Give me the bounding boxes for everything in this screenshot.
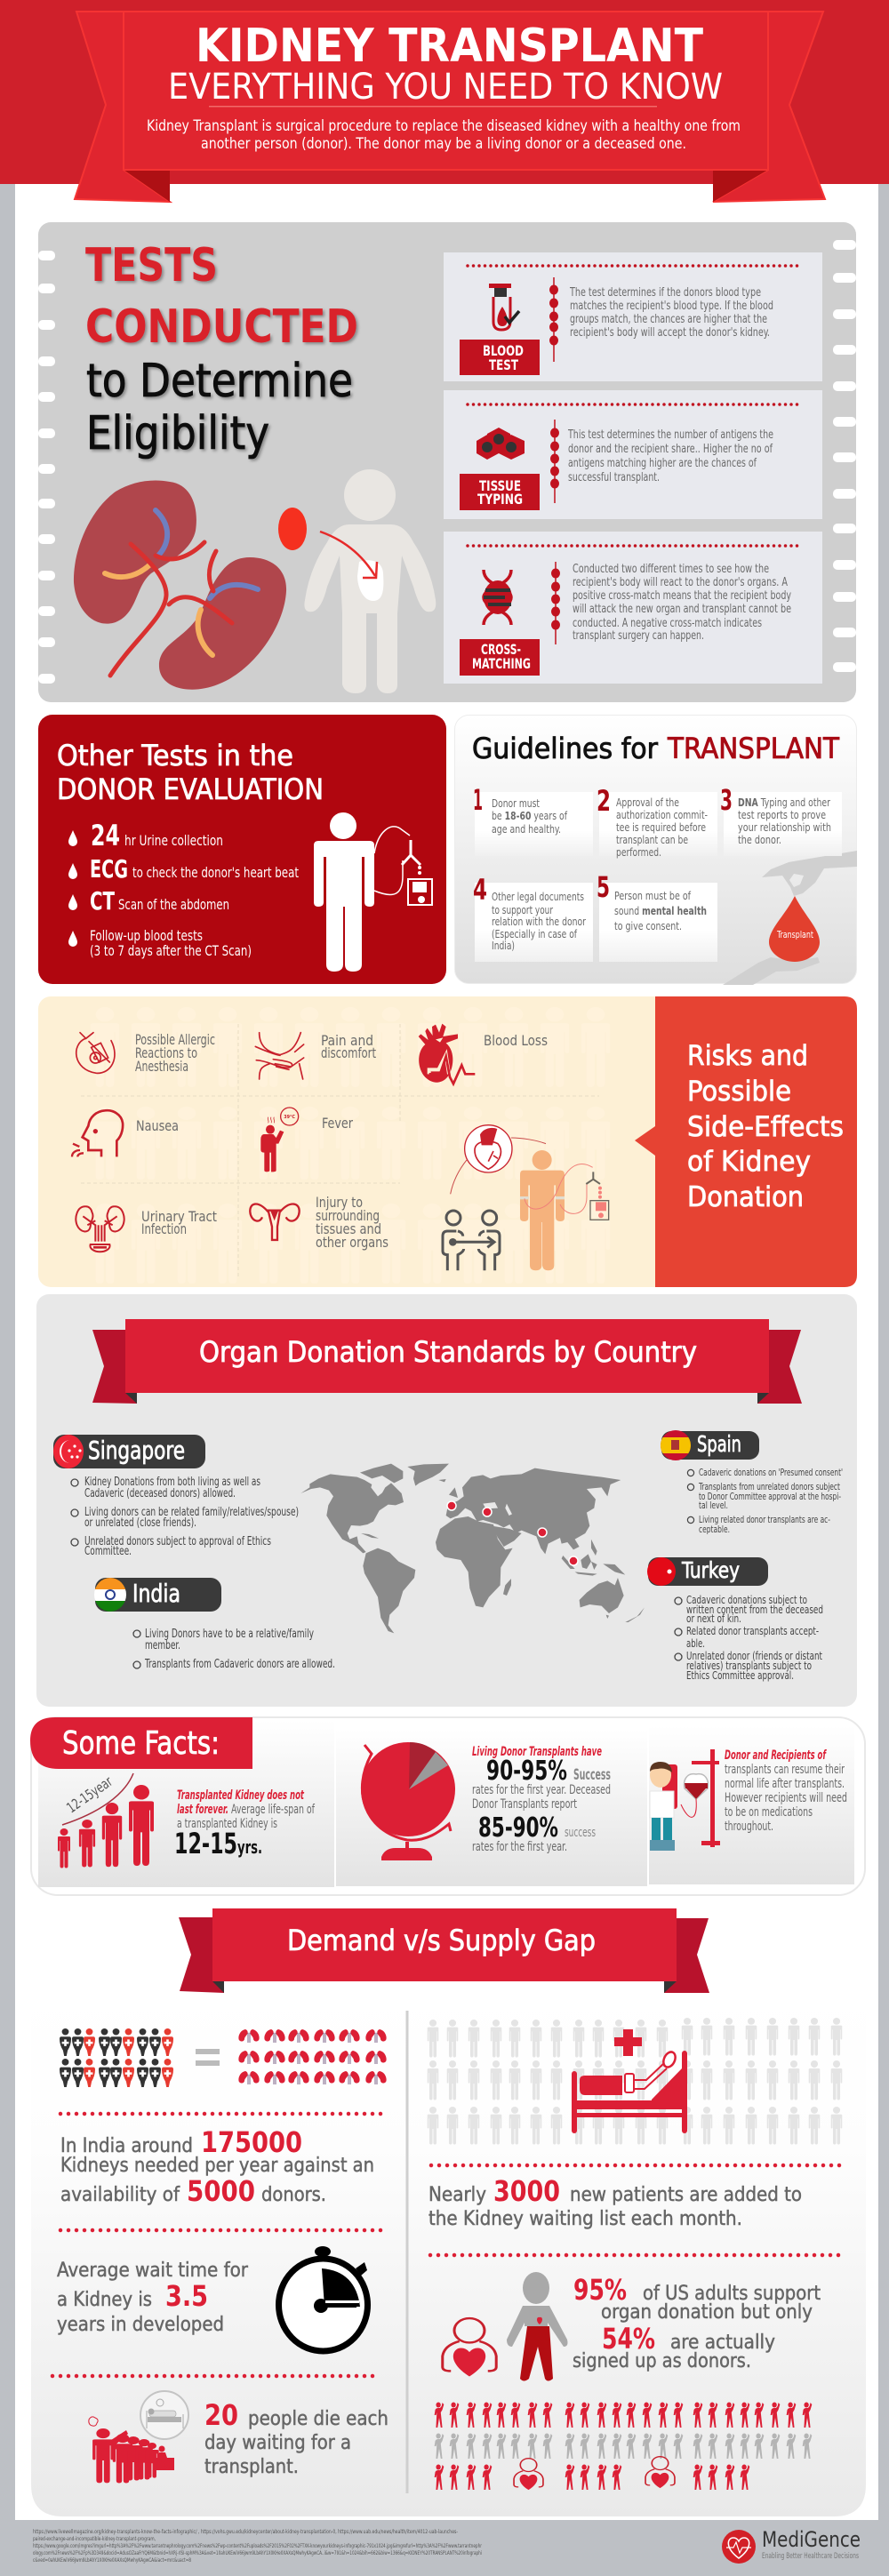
guideline 4: Other legal documents [492,890,584,903]
list: spain: tal level. [699,1500,728,1511]
footer: references: ology.com%2Fnews%2F%2Fp%3D349&docid=AdusOZaaFrYQ6M&tbnid=hXRj-rlSI-sphM%3A&vet=10ahUKEwiV66Jwm9LbAhY1X0KHe0XAXsQMwhyKAgwCA..i&w=791&h=1024&bih=662&biw=1366&q=KIDNEY%20TRANSPLANT%20infographi [33,2550,482,2556]
heading: guidelines: Guidelines for [472,732,658,765]
stat: wait time: years in developed [57,2314,224,2336]
guideline 4 [473,873,593,962]
text: cross-matching description: will attack the new organ and transplant cannot be [573,603,791,616]
list: singapore: Living donors can be related family/relatives/spouse) [84,1506,299,1519]
panel: tests conducted [38,222,856,702]
card: tissue typing [444,390,822,519]
banner: organ donation standards [92,1319,802,1404]
risk labels: Possible Allergic [135,1031,215,1048]
icon: uterus [250,1204,300,1240]
list: turkey: Ethics Committee approval. [686,1669,794,1682]
fact: kidney lifespan: 12-15 [174,1827,237,1860]
fact: life after transplant: However recipients will need [725,1791,847,1805]
fact: success rates: Donor Transplants report [472,1797,577,1812]
text: cross-matching description: recipient's body will react to the donor's organs. A [573,576,788,589]
banner: organ donation standards: Organ Donation Standards by Country [199,1335,697,1369]
guideline 3: the donor. [738,833,781,846]
icon: donor support figure [443,2272,567,2380]
heading: tests conducted to determine eligibility: to Determine [86,355,353,408]
risk labels: Blood Loss [484,1032,548,1049]
guideline 5: Person must be of [614,889,692,902]
label: cross-matching: CROSS- [481,641,521,658]
icon: allergic reaction [76,1033,115,1073]
stat: 175000 kidneys [60,2125,374,2208]
panel: other tests in the donor evaluation [38,715,446,984]
heading: guidelines [472,732,839,765]
label: tissue typing: TISSUE [479,477,521,494]
stat: 175000 kidneys: 175000 [201,2125,302,2159]
fact: kidney lifespan: Transplanted Kidney does not [177,1788,305,1803]
stat: 20 people die: people die each [248,2408,388,2430]
stat: 3000 new patients: the Kidney waiting list each month. [428,2208,742,2230]
list: singapore: Committee. [84,1545,132,1558]
list: spain: Transplants from unrelated donors subject [698,1482,840,1492]
stat: 175000 kidneys: donors. [261,2184,326,2206]
icon: kidneys [74,480,286,690]
stat: 20 people die: 20 [204,2398,238,2432]
stat: wait time [57,2260,249,2336]
list: singapore: Kidney Donations from both living as well as [84,1476,260,1489]
guideline 4: relation with the donor [492,915,586,928]
guideline 2: tee is required before [616,820,706,834]
list: turkey: Cadaveric donations subject to [686,1594,807,1606]
logo: medigence [722,2527,861,2564]
list: turkey: or next of kin. [686,1612,741,1625]
icon: waiting-list crowd and hospital bed [428,2018,842,2145]
text: cross-matching description: conducted. A negative cross-match indicates [573,617,762,630]
text: tissue typing description: This test determines the number of antigens the [567,428,773,442]
label: cross-matching: MATCHING [472,655,531,672]
guideline 3: test reports to prove [738,808,826,821]
stat: 3000 new patients: new patients are added to [570,2184,802,2206]
guideline 5 [597,870,717,962]
text: cross-matching description: transplant surgery can happen. [573,629,704,643]
fact: success rates: 85-90% [478,1812,558,1844]
guideline 2: performed. [616,845,661,859]
stat: 20 people die: day waiting for a [204,2432,351,2454]
fact: success rates: Success [573,1766,611,1784]
label: tissue typing [460,474,540,510]
icon: donor figure with blood bag [314,812,432,972]
text: cross-matching description: positive cross-match means that the recipient body [573,589,791,603]
red heading panel: Donation [687,1181,804,1213]
icon: molecule [477,428,525,460]
icon: rows of people [435,2402,812,2490]
intro paragraph: Kidney Transplant is surgical procedure to replace the diseased kidney with a healthy one from [147,117,741,135]
red heading panel: of Kidney [687,1146,811,1178]
panel: some facts [30,1717,865,1895]
fact: life after transplant: to be on medications [725,1805,813,1820]
fact: kidney lifespan: last forever. [177,1803,228,1817]
list: spain [687,1468,843,1535]
fact: success rates: rates for the first year. Deceased [472,1783,611,1797]
heading: tests conducted to determine eligibility [85,239,358,460]
list: turkey: Related donor transplants accept- [686,1625,819,1637]
stat: 3000 new patients: 3000 [493,2174,560,2208]
text: blood test description: groups match, the chances are higher that the [570,313,767,326]
logo: medigence: MediGence [762,2527,861,2552]
risk labels: tissues and [316,1220,381,1237]
risk labels: Injury to [316,1194,363,1211]
list: tests: 24 [91,819,120,852]
icon: stopwatch [279,2246,368,2351]
guideline 1: be 18-60 years of [492,809,568,822]
guideline 5: 5 [597,870,610,904]
heading: tests conducted to determine eligibility: Eligibility [86,407,269,460]
icon: dna [484,570,512,625]
icon: transplant drop [769,896,820,962]
stat: 175000 kidneys: In India around [60,2135,193,2157]
risk labels: surrounding [316,1207,380,1224]
fact: success rates [472,1745,611,1854]
list: tests: to check the donor's heart beat [132,864,299,881]
intro paragraph [147,117,741,153]
guideline 5: to give consent. [614,919,682,932]
badge: india: India [132,1579,180,1608]
header ribbon [75,12,825,202]
stat: 20 people die: transplant. [204,2456,299,2478]
footer: references: c&ved=0ahUKEwiV66Jwm9LbAhY1X0KHe0XAXsQMwhyKAgwCA&iact=mrc&uact=8 [33,2557,191,2564]
badge: india [92,1577,221,1613]
heading: other tests [57,739,324,806]
list: spain: ceptable. [699,1524,730,1535]
badge: turkey [647,1557,768,1586]
panel: risks and side-effects [38,996,857,1287]
guideline 5: sound mental health [614,904,707,917]
risk labels: Fever [322,1115,353,1132]
list: tests: Scan of the abdomen [118,896,229,913]
guideline 3: DNA Typing and other [738,796,830,809]
card: blood test [444,252,822,381]
risk labels: Reactions to [135,1044,197,1061]
icon: test tube [489,284,519,330]
stat: 95% support: 95% [573,2273,627,2307]
map markers [447,1501,578,1565]
text: tissue typing description: antigens matching higher are the chances of [568,457,757,470]
list: tests: hr Urine collection [124,832,223,849]
label: cross-matching [460,639,540,676]
guideline 4: to support your [492,903,553,916]
list: turkey: relatives) transplants subject to [686,1660,812,1672]
red heading panel: Risks and [687,1040,808,1072]
icon: urinary tract [76,1206,124,1252]
header band [0,0,889,202]
fact: life after transplant: throughout. [725,1820,773,1834]
stat: 175000 kidneys: 5000 [187,2174,255,2208]
stat: 95% support: organ donation but only [601,2301,813,2324]
heading: other tests: Other Tests in the [57,739,293,772]
risk labels: Pain and [321,1032,373,1049]
icon: heart with pulse [419,1024,475,1084]
fact: kidney lifespan [58,1772,315,1868]
guideline 2: transplant can be [616,833,688,846]
list: spain: to Donor Committee approval at the hospi- [699,1492,841,1502]
hands holding a drop [723,851,857,985]
list: tests: Follow-up blood tests [90,927,203,944]
label: tissue typing: TYPING [477,491,523,508]
guideline 2: authorization commit- [616,808,708,821]
panel: guidelines for transplant [455,715,857,985]
icon: fever: 39°C [284,1115,295,1120]
banner: demand vs supply gap: Demand v/s Supply Gap [287,1924,596,1957]
guideline 4: (Especially in case of [492,927,578,940]
guideline 1: Donor must [492,796,540,810]
list: india [133,1628,335,1671]
guideline 3: your relationship with [738,820,831,834]
text: blood test description: recipient's body will accept the donor's kidney. [570,326,770,340]
list: singapore: Cadaveric (deceased donors) allowed. [84,1487,236,1500]
text: tissue typing description: successful transplant. [568,471,660,484]
badge: spain [658,1429,759,1461]
list: tests: CT [90,886,116,916]
stat: 95% support: of US adults support [643,2283,821,2305]
fact: kidney lifespan: Average life-span of [231,1803,315,1817]
text: blood test description: matches the recipient's blood type. If the blood [570,300,773,313]
icon: fever [260,1108,299,1172]
risk labels [135,1031,548,1251]
icon: nausea [72,1110,123,1156]
list: tests: ECG [90,854,128,884]
icon: patient with drip stand [650,1749,720,1851]
tab: some facts [30,1717,252,1769]
fact: life after transplant: transplants can resume their [725,1763,845,1777]
fact: kidney lifespan: 12-15year [63,1772,116,1816]
list: turkey: written content from the deceased [686,1604,823,1616]
panel: demand vs supply [31,1908,866,2516]
icon: globe pie chart [361,1742,455,1860]
red heading panel: Side-Effects [687,1111,844,1143]
subtitle: EVERYTHING YOU NEED TO KNOW [168,67,723,108]
text: cross-matching description: Conducted two different times to see how the [573,563,769,576]
fact: success rates: 90-95% [486,1756,567,1787]
text: blood test description [569,286,773,340]
title: KIDNEY TRANSPLANT [196,20,703,73]
list: india: member. [145,1639,180,1652]
list: turkey [675,1594,823,1682]
stat: 95% support: signed up as donors. [573,2350,751,2372]
guideline 1: 1 [473,783,483,817]
stat: wait time: a Kidney is [57,2289,152,2311]
stat: 95% support: are actually [670,2332,775,2354]
stat: wait time: Average wait time for [57,2260,249,2282]
list: singapore [71,1476,299,1558]
fact: life after transplant [725,1748,847,1834]
heading: guidelines: TRANSPLANT [667,732,839,765]
text: cross-matching description [573,563,791,643]
text: blood test description: The test determines if the donors blood type [569,286,761,300]
heading: tests conducted to determine eligibility: TESTS [85,239,218,292]
stat: 175000 kidneys: Kidneys needed per year against an [60,2155,374,2177]
guideline 2 [597,784,717,859]
intro paragraph: another person (donor). The donor may be a living donor or a deceased one. [201,135,686,153]
guideline 2: Approval of the [616,796,679,809]
guideline 1: age and healthy. [492,822,561,836]
list: singapore: or unrelated (close friends). [84,1516,196,1530]
icon: orange figure with blood bag [520,1150,609,1270]
icon: people equal kidneys [60,2028,387,2087]
stat: 95% support: 54% [602,2322,655,2356]
text: tissue typing description [567,428,773,484]
stat: 3000 new patients: Nearly [428,2184,486,2206]
tab: some facts: Some Facts: [62,1725,220,1762]
icon: heart in circle [451,1125,546,1194]
label: blood test: TEST [489,356,518,373]
guideline 4: India) [492,939,515,952]
footer: references: https://www.livewellmagazine.org/kidney-transplants-know-the-facts-infographic/ , https://vohs.gwu.edu/kidneycenter/about-kidney-transplantation-0, https://www.uab.edu/news/health/item/4012-uab-launches- [33,2529,458,2535]
icon: two people exchange [443,1211,500,1270]
risk labels: discomfort [321,1044,376,1061]
footer: references [33,2529,483,2564]
red heading panel: Possible [687,1076,791,1108]
fact: life after transplant: Donor and Recipients of [725,1748,827,1763]
badge: turkey: Turkey [681,1557,740,1583]
icons drawn in zoom space: allergic, pain, nausea, fever, urinary, uterus [72,1033,304,1252]
list: spain: Cadaveric donations on 'Presumed consent' [699,1468,843,1478]
label: blood test: BLOOD [483,342,524,359]
stat: 3000 new patients [428,2174,802,2230]
stat: wait time: 3.5 [165,2279,208,2313]
list: turkey: Unrelated donor (friends or distant [686,1650,822,1662]
footer: references: https://www.google.com/imgres?imgurl=http%3A%2F%2Fwww.tarrantnephrology.com%2Fnews%2Fwp-content%2Fuploads%2F2015%2F02%2FTXK-knowyourkidneys-infographic-791x1024.jpg&imgrefurl=http%3A%2F%2Fwww.tarrantnephr [33,2543,483,2549]
fact: life after transplant: normal life after transplants. [725,1777,845,1791]
guideline 2: 2 [597,784,611,818]
stat: 20 people die [204,2398,388,2478]
fact: success rates: rates for the first year. [472,1840,567,1854]
stat: 175000 kidneys: availability of [60,2184,180,2206]
fact: success rates: success [565,1826,596,1840]
background people pattern [91,1007,610,1284]
guideline 1 [473,783,593,856]
badge: spain: Spain [697,1431,741,1457]
list: tests: (3 to 7 days after the CT Scan) [90,942,252,959]
heading: other tests: DONOR EVALUATION [57,772,324,806]
list: singapore: Unrelated donors subject to approval of Ethics [84,1535,271,1548]
list: spain: Living related donor transplants are ac- [699,1515,830,1525]
badge: singapore [53,1435,205,1468]
stat: 95% support [573,2273,821,2372]
icon: human body with transplanted kidney [278,469,436,693]
footer: references: paired-exchange-and-incompatible-kidney-transplant-program, [33,2536,156,2542]
red heading panel [635,996,857,1287]
label: blood test [460,340,540,375]
list: tests [68,819,299,959]
fact: success rates: Living Donor Transplants have [472,1745,602,1759]
panel: organ donation standards by country [36,1294,857,1707]
list: turkey: able. [686,1637,705,1650]
risk labels: Anesthesia [135,1058,188,1075]
risk labels: Nausea [136,1117,179,1134]
risk labels: Infection [141,1220,187,1237]
fact: kidney lifespan: a transplanted Kidney is [177,1817,277,1831]
text: tissue typing description: donor and the recipient share.. Higher the no of [568,443,773,456]
risk labels: Urinary Tract [141,1208,217,1225]
risk labels: other organs [316,1234,388,1251]
heading: tests conducted to determine eligibility: CONDUCTED [85,300,358,354]
guideline 4: 4 [473,873,487,907]
guideline 3: 3 [720,783,733,817]
icon: transplant drop: Transplant [776,929,813,940]
icon: waiting crowd [89,2391,188,2483]
world map [300,1464,645,1633]
list: india: Living Donors have to be a relative/family [145,1628,314,1641]
list: india: Transplants from Cadaveric donors are allowed. [144,1658,335,1671]
badge: singapore: Singapore [88,1436,185,1465]
fact: kidney lifespan: yrs. [237,1836,262,1858]
icon: pain [255,1033,304,1079]
card: cross-matching [444,532,822,684]
banner: demand vs supply gap [179,1908,709,1993]
guideline 3 [720,783,842,856]
